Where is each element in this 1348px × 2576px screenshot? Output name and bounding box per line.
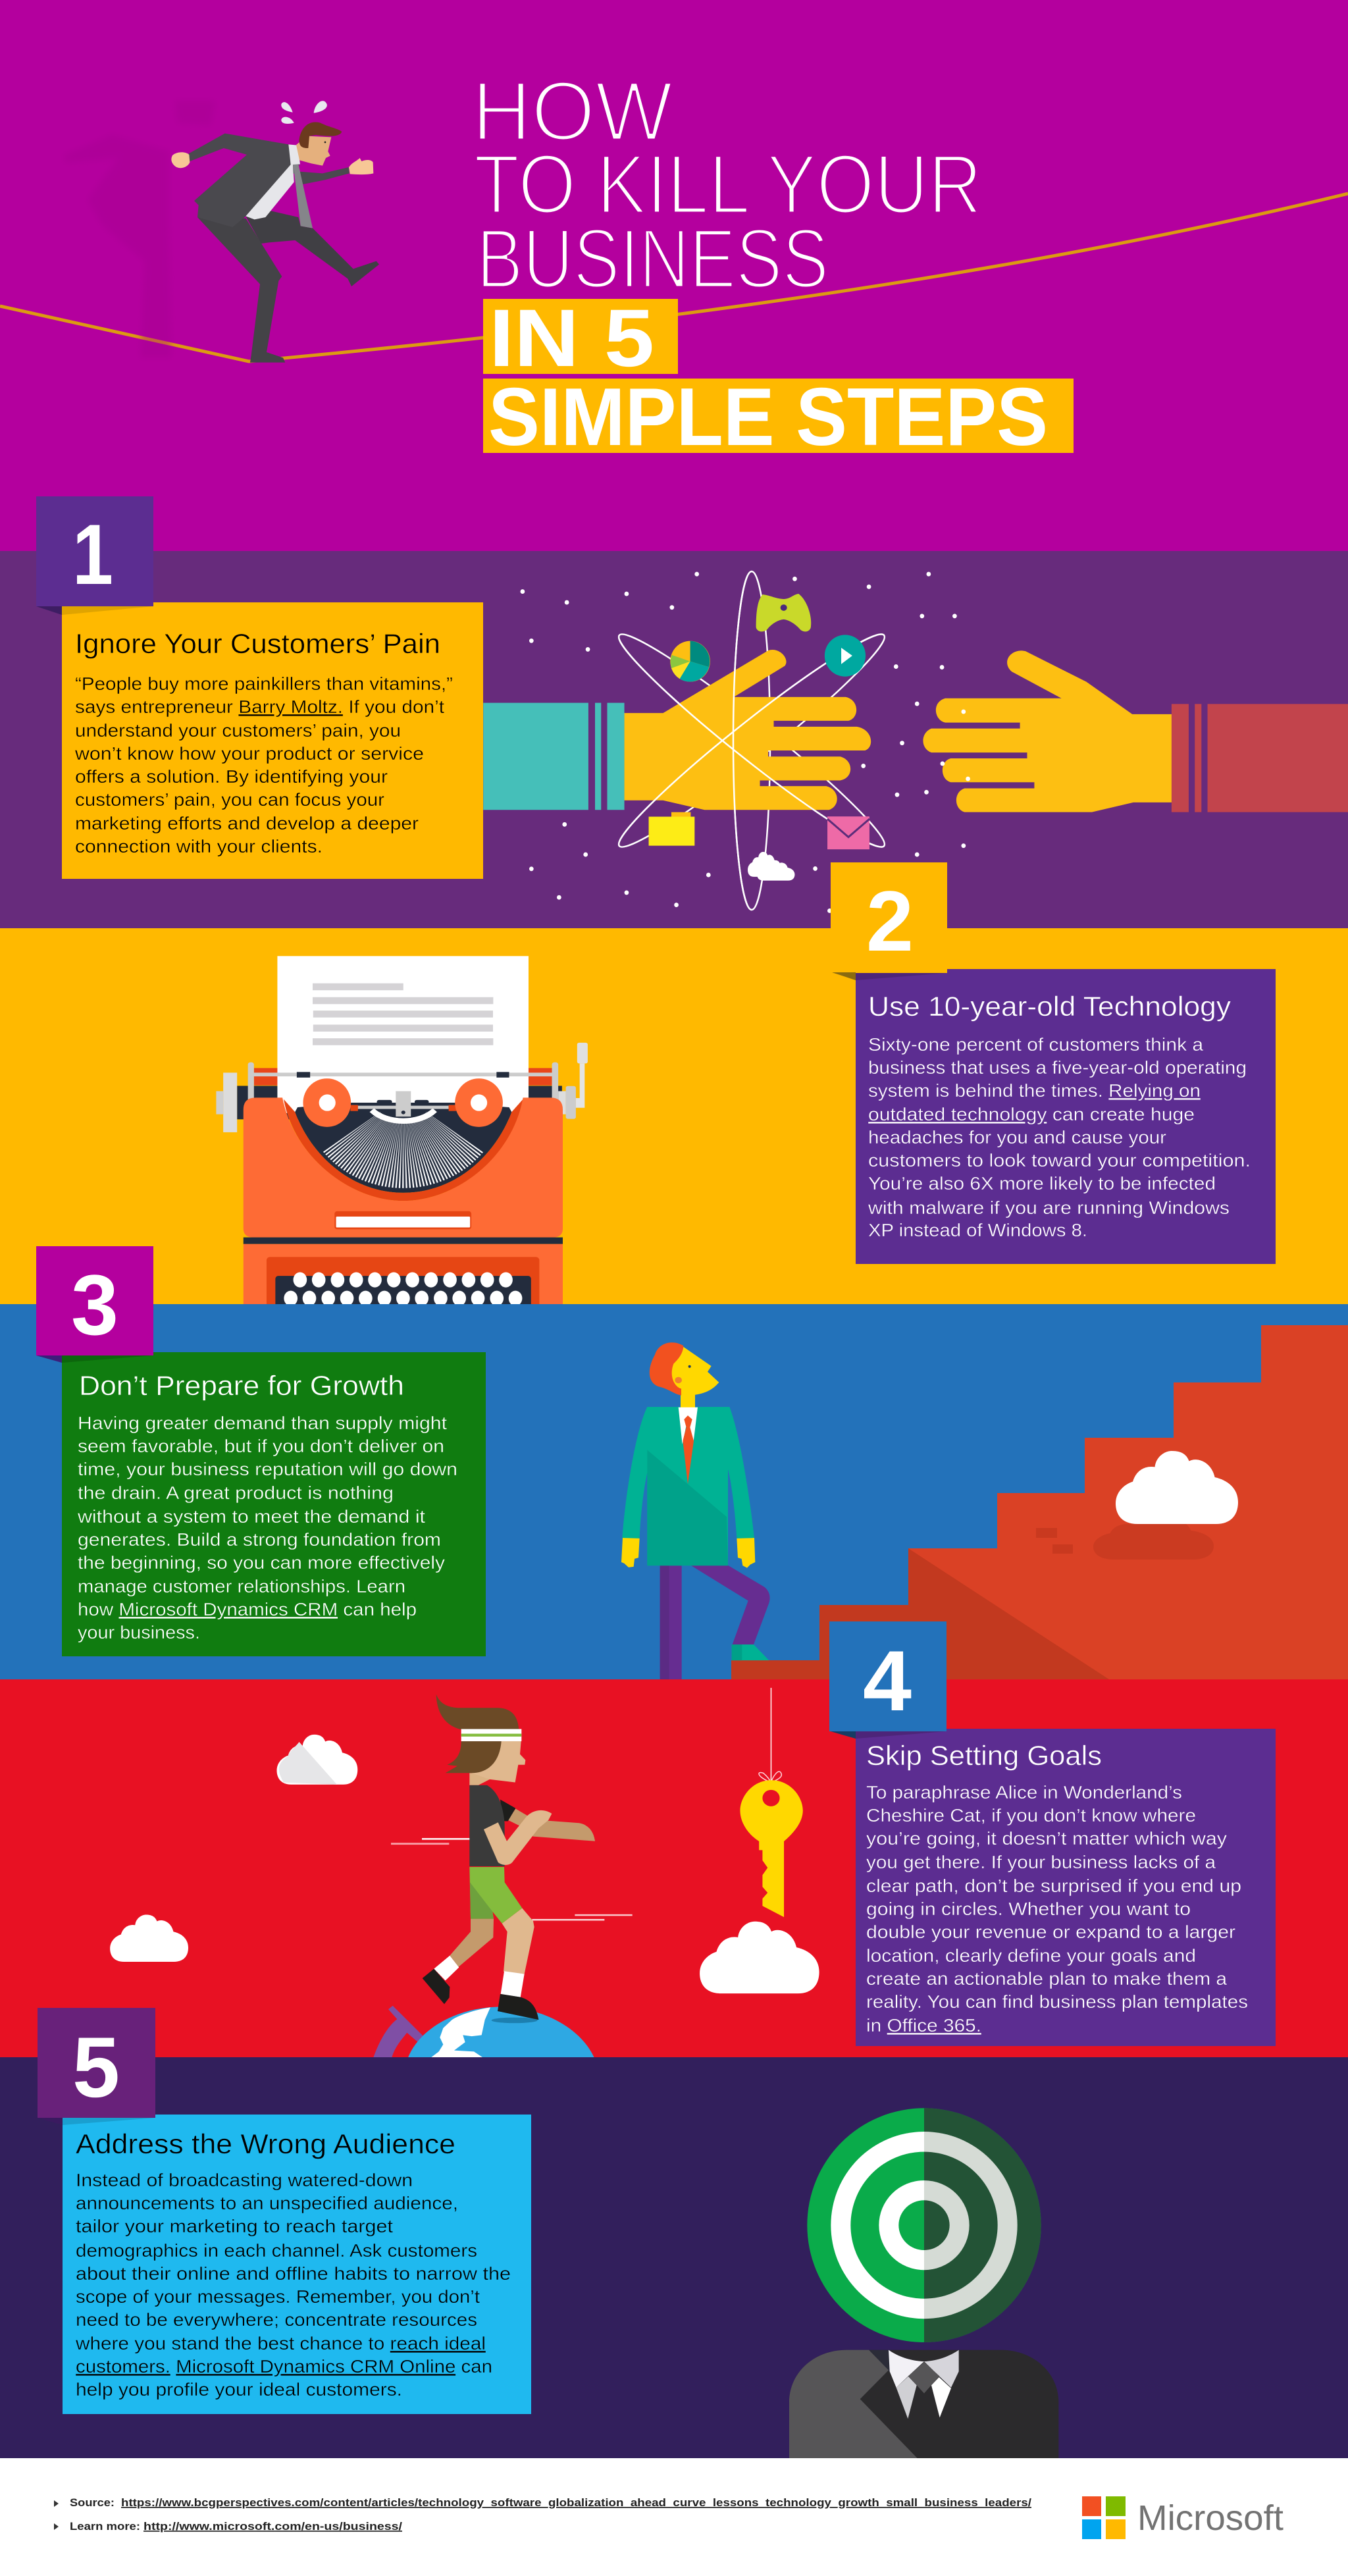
icon: globe [373,2006,594,2059]
heading: Address the Wrong Audience [76,2128,455,2159]
body text: without a system to meet the demand it [77,1506,425,1527]
body text: customers to look toward your competition. [868,1150,1251,1170]
icon: cloud top [277,1735,357,1785]
section 4 background [0,1679,1348,2057]
number badge 3: 3 [71,1257,118,1353]
icon: cloud left [110,1915,188,1962]
heading: Ignore Your Customers’ Pain [75,628,440,659]
title: SIMPLE STEPS [488,372,1048,463]
body text: business that uses a five-year-old operating [868,1057,1247,1078]
body text: your business. [78,1622,200,1643]
body text [75,2170,511,2400]
panel: step 5 [63,2115,531,2414]
body text: reality. You can find business plan templates [866,1991,1248,2012]
section 1 background [0,551,1348,928]
body text: double your revenue or expand to a larger [866,1922,1235,1942]
illustration: two hands with orbiting icons [483,571,1348,913]
number badge 4 [829,1621,946,1739]
panel: step 3 [62,1352,486,1656]
body text: offers a solution. By identifying your [75,766,388,787]
body text: headaches for you and cause your [868,1127,1166,1147]
body text [77,1413,457,1643]
tightrope [0,194,1348,361]
illustration: typewriter [216,956,588,1308]
body text: connection with your clients. [75,836,323,856]
body text: won’t know how your product or service [74,743,424,764]
stars [521,572,970,913]
footer background [0,2458,1348,2576]
body text: outdated technology can create huge [868,1104,1195,1124]
body text: generates. Build a strong foundation from [78,1529,441,1550]
body text: Instead of broadcasting watered-down [76,2170,413,2190]
section 2 background [0,928,1348,1304]
body text: the beginning, so you can more effectively [78,1552,445,1573]
body text: you’re going, it doesn’t matter which way [866,1828,1227,1849]
icon: pie chart [670,641,710,682]
footer sources: http://www.microsoft.com/en-us/business/ [143,2520,402,2533]
body text: going in circles. Whether you want to [866,1899,1191,1919]
heading: Use 10-year-old Technology [868,991,1231,1022]
body text: you get there. If your business lacks of a [866,1852,1216,1872]
Microsoft logo [1082,2496,1283,2539]
number badge 5 [38,2008,155,2125]
panel: step 2 [856,969,1276,1264]
body text: with malware if you are running Windows [868,1197,1230,1218]
body text: customers. Microsoft Dynamics CRM Online can [76,2356,492,2377]
title: TO KILL YOUR [474,138,982,232]
section 5 background [0,2057,1348,2458]
body text: understand your customers’ pain, you [75,720,401,741]
body text: Cheshire Cat, if you don’t know where [866,1805,1196,1826]
body text: announcements to an unspecified audience, [76,2193,458,2213]
number badge 2: 2 [866,873,914,969]
body text: says entrepreneur Barry Moltz. If you don’t [75,697,444,717]
number badge 4: 4 [863,1633,912,1729]
panel: step 1 [62,602,483,879]
number badge 2 [831,862,947,980]
number badge 3 [36,1246,153,1363]
illustration: target-head businessman [789,2108,1058,2459]
body text: create an actionable plan to make them a [866,1968,1227,1989]
speed lines [391,1838,633,1920]
icon: cloud right [700,1922,819,1993]
title: HOW [472,65,673,159]
Microsoft logo: Microsoft [1137,2498,1283,2538]
suit [789,2350,1058,2459]
section 3 background [0,1304,1348,1679]
icon: play button [825,635,866,677]
body text: about their online and offline habits to narrow the [76,2263,511,2284]
illustration: man in green suit [621,1342,770,1680]
footer sources [54,2496,1031,2533]
icon: game controller [756,594,811,631]
panel: step 4 [856,1729,1276,2046]
icon: cloud [748,852,794,881]
title: BUSINESS [477,212,829,306]
heading: Don’t Prepare for Growth [79,1370,404,1401]
illustration: businessman on tightrope [64,101,379,363]
icon: envelope [827,816,869,849]
title: IN 5 [489,293,654,384]
body text: Having greater demand than supply might [78,1413,447,1433]
body text: tailor your marketing to reach target [76,2216,393,2236]
body text: Sixty-one percent of customers think a [868,1034,1203,1055]
body text [866,1782,1248,2036]
body text: help you profile your ideal customers. [76,2379,402,2400]
keyboard keys [284,1273,522,1306]
title [472,65,1074,463]
body text: marketing efforts and develop a deeper [75,813,419,833]
footer sources: Source: [70,2496,115,2509]
body text: manage customer relationships. Learn [78,1576,405,1596]
body text: need to be everywhere; concentrate resources [76,2309,477,2330]
icon: folder [649,812,694,846]
body text: time, your business reputation will go down [78,1459,457,1479]
body text: where you stand the best chance to reach ideal [75,2333,486,2353]
body text: customers’ pain, you can focus your [75,789,384,810]
body text: scope of your messages. Remember, you don’t [76,2286,480,2307]
number badge 1 [36,496,153,615]
body text: how Microsoft Dynamics CRM can help [78,1599,417,1619]
number badge 5: 5 [72,2019,120,2115]
icon: cloud [1116,1451,1238,1524]
body text: You’re also 6X more likely to be infected [868,1173,1216,1194]
body text [868,1034,1251,1240]
body text: the drain. A great product is nothing [78,1483,394,1503]
footer sources: https://www.bcgperspectives.com/content/articles/technology_software_globalization_ahead_curve_lessons_technology_growth_small_business_leaders/ [121,2496,1031,2509]
body text: system is behind the times. Relying on [868,1080,1201,1101]
target head [807,2108,1041,2342]
number badge 1: 1 [72,506,113,602]
body text: clear path, don’t be surprised if you end up [866,1876,1241,1896]
heading: Skip Setting Goals [866,1740,1102,1771]
icon: hanging key [740,1688,803,1917]
body text: in Office 365. [866,2015,981,2036]
footer sources: Learn more: [70,2520,140,2533]
body text: “People buy more painkillers than vitamins,” [75,673,453,694]
body text: XP instead of Windows 8. [868,1220,1087,1240]
body text [74,673,453,856]
body text: demographics in each channel. Ask customers [76,2240,477,2261]
body text: location, clearly define your goals and [866,1945,1196,1966]
clouds and key [110,1688,819,1993]
body text: seem favorable, but if you don’t deliver on [78,1436,444,1456]
illustration: red staircase [731,1325,1348,1679]
body text: To paraphrase Alice in Wonderland’s [866,1782,1182,1802]
illustration: runner on globe [373,1695,633,2059]
header background [0,0,1348,551]
paper with text lines [277,956,529,1113]
